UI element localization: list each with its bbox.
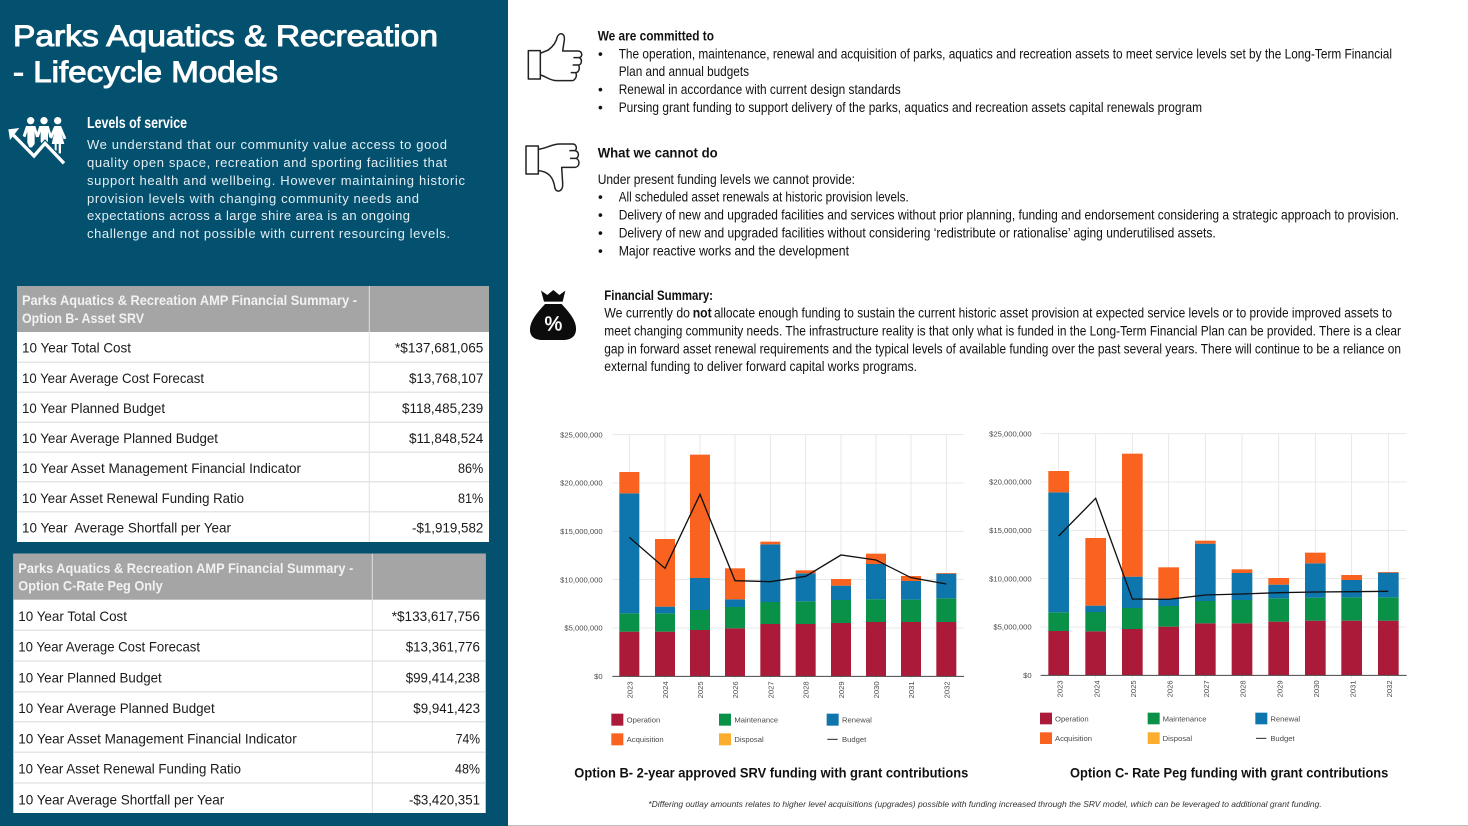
section: we are committed to (598, 29, 1392, 115)
chart: option C stacked bars: 2024 (1092, 680, 1101, 697)
text block: levels of service: challenge and not possible with current resourcing levels. (87, 226, 450, 241)
table rows: option C: 10 Year Average Planned Budget (18, 700, 215, 716)
chart: option B stacked bars: $10,000,000 (560, 575, 603, 584)
text block: levels of service: support health and wellbeing. However maintaining historic (87, 173, 466, 188)
table rows: option B: 10 Year Average Cost Forecast (22, 370, 204, 386)
legend: option B: Acquisition (627, 735, 664, 744)
table rows: option C: 10 Year Planned Budget (18, 669, 162, 685)
table rows: option B: $118,485,239 (402, 400, 483, 416)
chart: option C stacked bars: $15,000,000 (989, 526, 1032, 535)
section: what we cannot do: • (598, 190, 603, 205)
chart: option B stacked bars: 2028 (802, 681, 811, 698)
chart: option B stacked bars: $20,000,000 (560, 479, 603, 488)
footnote: *Differing outlay amounts relates to higher level acquisitions (upgrades) possible with funding increased through the SRV model, which can be leveraged to additional grant funding. (648, 800, 1322, 809)
chart: option C stacked bars: 2023 (1055, 680, 1064, 697)
icon: money bag with percent: % (544, 314, 562, 336)
chart: option B stacked bars: 2023 (625, 681, 634, 698)
text block: levels of service: quality open space, recreation and sporting facilities that (87, 155, 447, 170)
section: what we cannot do: All scheduled asset renewals at historic provision levels. (619, 190, 909, 205)
title (13, 20, 438, 89)
table rows: option B: 10 Year Average Planned Budget (22, 430, 218, 446)
section: financial summary (604, 288, 1401, 374)
section: we are committed to: • (598, 82, 603, 97)
chart: option C stacked bars: $10,000,000 (989, 574, 1032, 583)
caption: option B chart: Option B- 2-year approved SRV funding with grant contributions (574, 766, 968, 781)
table rows: option B: $13,768,107 (409, 370, 483, 386)
caption: option C chart: Option C- Rate Peg funding with grant contributions (1070, 766, 1388, 781)
legend: option C: Operation (1055, 714, 1089, 723)
table rows: option B: 81% (458, 490, 483, 506)
section: financial summary: not (693, 306, 712, 321)
icon: money bag with percent (530, 290, 576, 340)
section: we are committed to: • (598, 100, 603, 115)
chart: option C stacked bars: 2029 (1275, 680, 1284, 697)
chart: option C stacked bars: 2030 (1312, 680, 1321, 697)
section: what we cannot do: What we cannot do (598, 145, 718, 160)
legend: option C: Renewal (1270, 714, 1300, 723)
section: we are committed to: Pursing grant funding to support delivery of the parks, aquatics and recreation assets capital renewals program (619, 100, 1202, 115)
table header: option C (18, 560, 354, 594)
legend: option B (611, 714, 872, 745)
table rows: option B: $11,848,524 (409, 430, 483, 446)
section: financial summary: external funding to deliver forward capital works programs. (604, 359, 917, 374)
chart: option B stacked bars: $15,000,000 (560, 527, 603, 536)
chart: option C stacked bars: $0 (1023, 671, 1032, 680)
chart: option C stacked bars: 2026 (1165, 680, 1174, 697)
legend: option B: Disposal (734, 735, 764, 744)
chart: option C stacked bars: $25,000,000 (989, 429, 1032, 438)
table: option B financial summary (17, 286, 489, 542)
heading: levels of service: Levels of service (87, 115, 187, 132)
chart: option C stacked bars: 2028 (1239, 680, 1248, 697)
title: Parks Aquatics & Recreation (13, 20, 438, 53)
table rows: option C: -$3,420,351 (409, 791, 480, 807)
chart: option C stacked bars: $20,000,000 (989, 478, 1032, 487)
table rows: option B: 10 Year Planned Budget (22, 400, 165, 416)
chart: option B stacked bars: 2026 (731, 681, 740, 698)
table rows: option C (18, 608, 480, 807)
chart: option B stacked bars: 2030 (872, 681, 881, 698)
section: we are committed to: Plan and annual budgets (619, 64, 749, 79)
chart: option B stacked bars: 2024 (661, 681, 670, 698)
chart: option C stacked bars: 2032 (1385, 680, 1394, 697)
section: what we cannot do: Major reactive works and the development (619, 243, 849, 258)
title: - Lifecycle Models (13, 56, 278, 89)
icon: thumbs up (528, 34, 582, 81)
table rows: option C: 10 Year Asset Renewal Funding Ratio (18, 761, 241, 777)
table rows: option B: 10 Year Asset Renewal Funding Ratio (22, 490, 244, 506)
chart: option B stacked bars: 2029 (837, 681, 846, 698)
text block: levels of service: provision levels with changing community needs and (87, 191, 419, 206)
chart: option C stacked bars: 2025 (1129, 680, 1138, 697)
section: we are committed to: • (598, 46, 603, 61)
text block: levels of service: expectations across a large shire area is an ongoing (87, 208, 410, 223)
table header: option B: Option B- Asset SRV (22, 310, 145, 326)
icon: people with trend arrow (8, 117, 66, 163)
table rows: option B (22, 340, 484, 536)
table rows: option C: 10 Year Average Cost Forecast (18, 639, 200, 655)
section: financial summary: We currently do (604, 306, 690, 321)
table rows: option C: $9,941,423 (413, 700, 480, 716)
legend: option B: Renewal (842, 715, 872, 724)
chart: option B stacked bars: 2031 (907, 681, 916, 698)
table rows: option C: *$133,617,756 (392, 608, 480, 624)
legend: option C: Budget (1270, 734, 1295, 743)
legend: option B: Budget (842, 735, 867, 744)
table rows: option B: 86% (458, 460, 483, 476)
legend: option B: Maintenance (734, 715, 778, 724)
table header: option B: Parks Aquatics & Recreation AMP Financial Summary - (22, 292, 357, 308)
section: we are committed to: We are committed to (598, 29, 714, 44)
section: what we cannot do: Delivery of new and upgraded facilities without considering ‘redistribute or rationalise’ aging underutilised assets. (619, 225, 1216, 240)
chart: option C stacked bars (989, 429, 1407, 744)
chart: option C stacked bars: $5,000,000 (993, 623, 1032, 632)
legend: option C (1040, 713, 1300, 744)
table rows: option C: $13,361,776 (406, 639, 480, 655)
chart: option B stacked bars: $0 (594, 672, 603, 681)
table rows: option B: -$1,919,582 (412, 520, 484, 536)
table header: option B (22, 292, 357, 326)
table rows: option C: 10 Year Asset Management Financial Indicator (18, 730, 297, 746)
chart: option B stacked bars: 2025 (696, 681, 705, 698)
chart: option B stacked bars: 2032 (942, 681, 951, 698)
section: we are committed to: Renewal in accordance with current design standards (619, 82, 901, 97)
table rows: option C: 10 Year Average Shortfall per Year (18, 791, 225, 807)
table rows: option C: $99,414,238 (406, 669, 480, 685)
section: what we cannot do: • (598, 208, 603, 223)
legend: option C: Disposal (1163, 734, 1192, 743)
table rows: option B: 10 Year Average Shortfall per Year (22, 520, 231, 536)
table: option C financial summary (13, 554, 486, 813)
chart: option C stacked bars: 2027 (1202, 680, 1211, 697)
text block: levels of service: We understand that our community value access to good (87, 137, 447, 152)
table rows: option C: 48% (455, 761, 480, 777)
chart: option B stacked bars (560, 430, 964, 745)
table rows: option B: 10 Year Asset Management Financial Indicator (22, 460, 301, 476)
table header: option C: Parks Aquatics & Recreation AMP Financial Summary - (18, 560, 354, 576)
chart: option B stacked bars: $5,000,000 (564, 624, 603, 633)
chart: option B stacked bars: $25,000,000 (560, 430, 603, 439)
chart: option C stacked bars: 2031 (1348, 680, 1357, 697)
table rows: option C: 74% (456, 730, 480, 746)
table rows: option C: 10 Year Total Cost (18, 608, 127, 624)
chart: option B stacked bars: 2027 (766, 681, 775, 698)
legend: option C: Maintenance (1163, 714, 1207, 723)
table rows: option B: 10 Year Total Cost (22, 340, 131, 356)
legend: option C: Acquisition (1055, 734, 1092, 743)
section: financial summary: Financial Summary: (604, 288, 713, 303)
text block: levels of service (87, 137, 466, 241)
table header: option C: Option C-Rate Peg Only (18, 578, 163, 594)
section: what we cannot do: • (598, 243, 603, 258)
table rows: option B: *$137,681,065 (395, 340, 484, 356)
legend: option B: Operation (627, 715, 660, 724)
section: what we cannot do: Under present funding levels we cannot provide: (598, 172, 855, 187)
panel: left sidebar (0, 0, 508, 826)
section: what we cannot do (598, 145, 1399, 258)
section: what we cannot do: • (598, 225, 603, 240)
icon: thumbs down (526, 144, 579, 191)
